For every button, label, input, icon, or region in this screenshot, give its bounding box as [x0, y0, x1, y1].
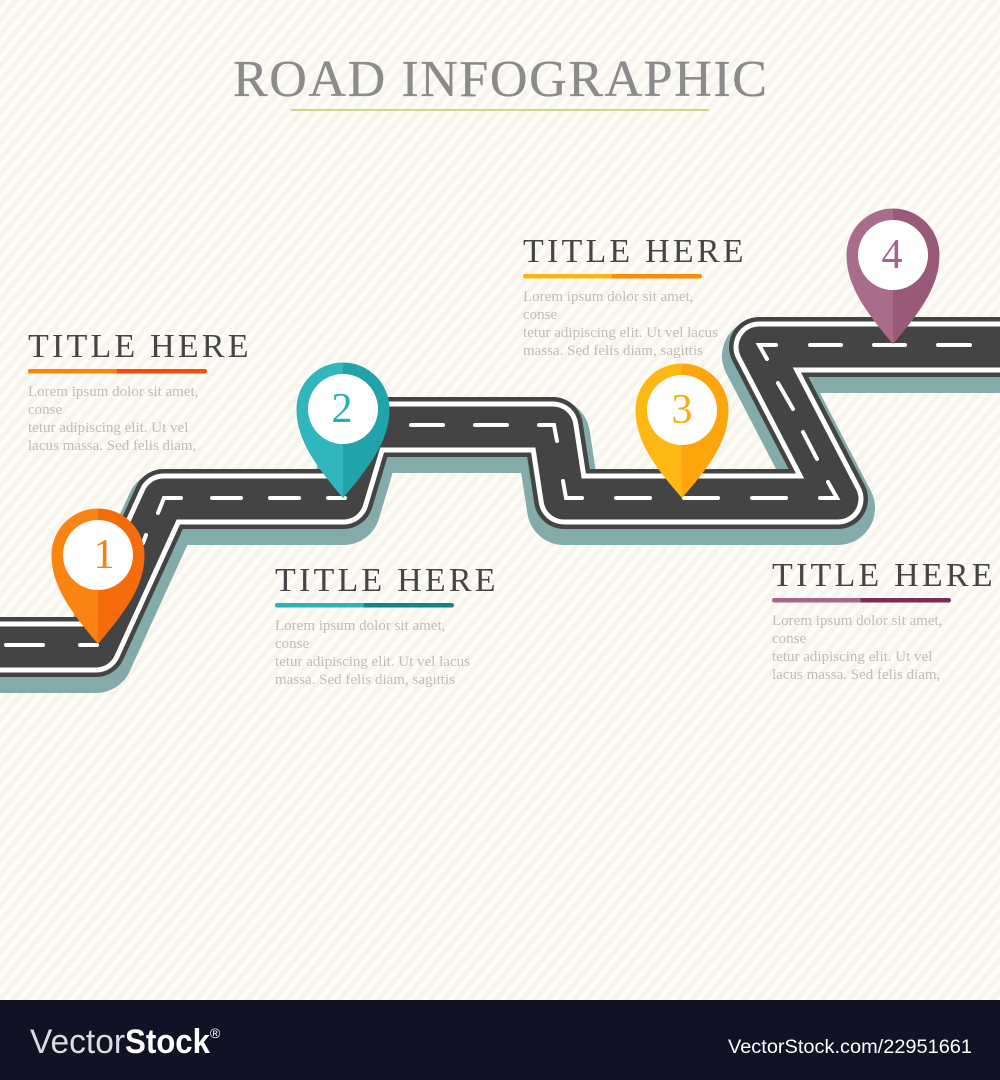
- pin 4: 4: [882, 232, 902, 278]
- body text 2: Lorem ipsum dolor sit amet,: [275, 618, 445, 634]
- accent bar 1: [28, 369, 207, 374]
- body text 1: Lorem ipsum dolor sit amet,: [28, 384, 198, 400]
- footer image id: VectorStock.com/22951661: [728, 1037, 972, 1058]
- text block 1: TITLE HERE: [28, 328, 252, 365]
- text block 1: [28, 328, 252, 454]
- body text 4: [772, 613, 942, 683]
- body text 2: [275, 618, 470, 688]
- road: [0, 345, 1000, 656]
- pin 3: [636, 364, 728, 498]
- body text 2: conse: [275, 636, 309, 652]
- text block 4: TITLE HERE: [772, 557, 996, 594]
- road surface: [0, 347, 1000, 647]
- body text 1: [28, 384, 198, 454]
- body text 3: conse: [523, 307, 557, 323]
- text block 2: [275, 562, 499, 688]
- body text 4: tetur adipiscing elit. Ut vel: [772, 649, 932, 665]
- pin 1: 1: [94, 532, 114, 578]
- pin 3: 3: [672, 387, 692, 433]
- text block 2: TITLE HERE: [275, 562, 499, 599]
- accent bar 3: [523, 274, 702, 278]
- body text 3: massa. Sed felis diam, sagittis: [523, 343, 703, 359]
- road shadow: [0, 356, 1000, 656]
- pin 1: [51, 508, 144, 644]
- text block 3: TITLE HERE: [523, 233, 747, 270]
- body text 1: lacus massa. Sed felis diam,: [28, 438, 196, 454]
- body text 1: conse: [28, 402, 62, 418]
- body text 3: Lorem ipsum dolor sit amet,: [523, 289, 693, 305]
- pin 4: [846, 208, 940, 344]
- body text 4: lacus massa. Sed felis diam,: [772, 667, 940, 683]
- body text 2: tetur adipiscing elit. Ut vel lacus: [275, 654, 470, 670]
- text block 4: [772, 557, 996, 683]
- road inner surface: [0, 347, 1000, 647]
- title underline: [291, 109, 709, 111]
- pin 2: 2: [332, 386, 352, 432]
- title: ROAD INFOGRAPHIC: [233, 51, 769, 108]
- road centre dashes: [6, 345, 970, 645]
- body text 2: massa. Sed felis diam, sagittis: [275, 672, 455, 688]
- body text 3: tetur adipiscing elit. Ut vel lacus: [523, 325, 718, 341]
- accent bar 2: [275, 603, 454, 608]
- body text 4: conse: [772, 631, 806, 647]
- body text 3: [523, 289, 718, 359]
- footer logo: VectorStock: [30, 1023, 210, 1061]
- body text 1: tetur adipiscing elit. Ut vel: [28, 420, 188, 436]
- pin 2: [296, 362, 390, 498]
- road edge lines: [0, 347, 1000, 647]
- footer registered mark: ®: [210, 1025, 221, 1041]
- body text 4: Lorem ipsum dolor sit amet,: [772, 613, 942, 629]
- text block 3: [523, 233, 747, 359]
- accent bar 4: [772, 598, 951, 602]
- footer bar: [0, 1000, 1000, 1080]
